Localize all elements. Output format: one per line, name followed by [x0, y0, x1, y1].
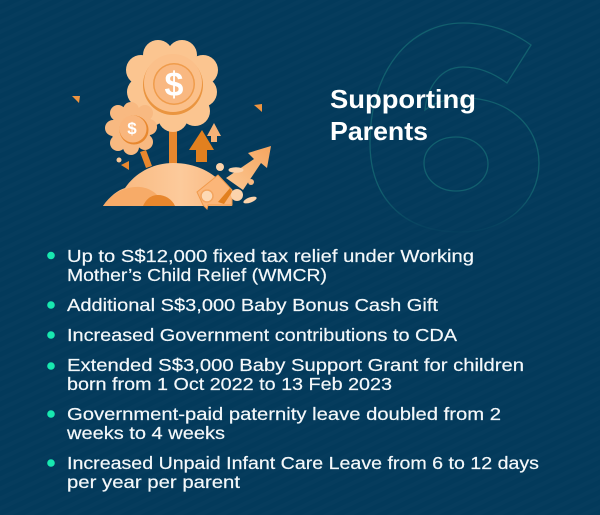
icon: large up arrow [189, 130, 214, 162]
bullet: WMCR tax relief [47, 246, 474, 285]
bullet: paternity leave [47, 404, 501, 443]
icon: small dollar flower: $ [127, 119, 137, 138]
large outlined number 6 [370, 23, 539, 232]
title: Supporting [330, 84, 476, 114]
icon: small triangle right [254, 104, 262, 112]
bullet: Baby Support Grant [47, 355, 524, 394]
icon: small triangle left [72, 96, 80, 103]
title [330, 84, 476, 146]
title: Parents [330, 116, 428, 146]
bullet: infant care leave: Increased Unpaid Infant Care Leave from 6 to 12 days [67, 453, 539, 473]
bullet: CDA: Increased Government contributions to CDA [67, 325, 457, 345]
bullet: paternity leave: Government-paid paternity leave doubled from 2 [67, 404, 501, 424]
bullet list [47, 246, 539, 492]
illustration: money flowers growing on a hill [72, 40, 271, 209]
icon: flower stems [140, 123, 177, 168]
bullet: infant care leave [47, 453, 539, 492]
icon: scattered coins and block [116, 158, 257, 209]
bullet: Baby Bonus: Additional S$3,000 Baby Bonus Cash Gift [67, 295, 438, 315]
icon: large dollar flower: $ [165, 66, 184, 104]
icon: rising diagonal arrow [226, 146, 271, 190]
bullet: infant care leave: per year per parent [67, 472, 240, 492]
bullet: WMCR tax relief: Up to S$12,000 fixed tax relief under Working [67, 246, 474, 266]
icon: small dollar flower [105, 102, 157, 155]
icon: small up arrow [207, 123, 221, 142]
bullet: paternity leave: weeks to 4 weeks [66, 423, 225, 443]
icon: large dollar flower [126, 40, 218, 132]
icon: hill [103, 163, 232, 206]
bullet: WMCR tax relief: Mother’s Child Relief (WMCR) [67, 265, 327, 285]
bullet: Baby Support Grant: Extended S$3,000 Baby Support Grant for children [67, 355, 524, 375]
bullet: Baby Support Grant: born from 1 Oct 2022 to 13 Feb 2023 [67, 374, 392, 394]
